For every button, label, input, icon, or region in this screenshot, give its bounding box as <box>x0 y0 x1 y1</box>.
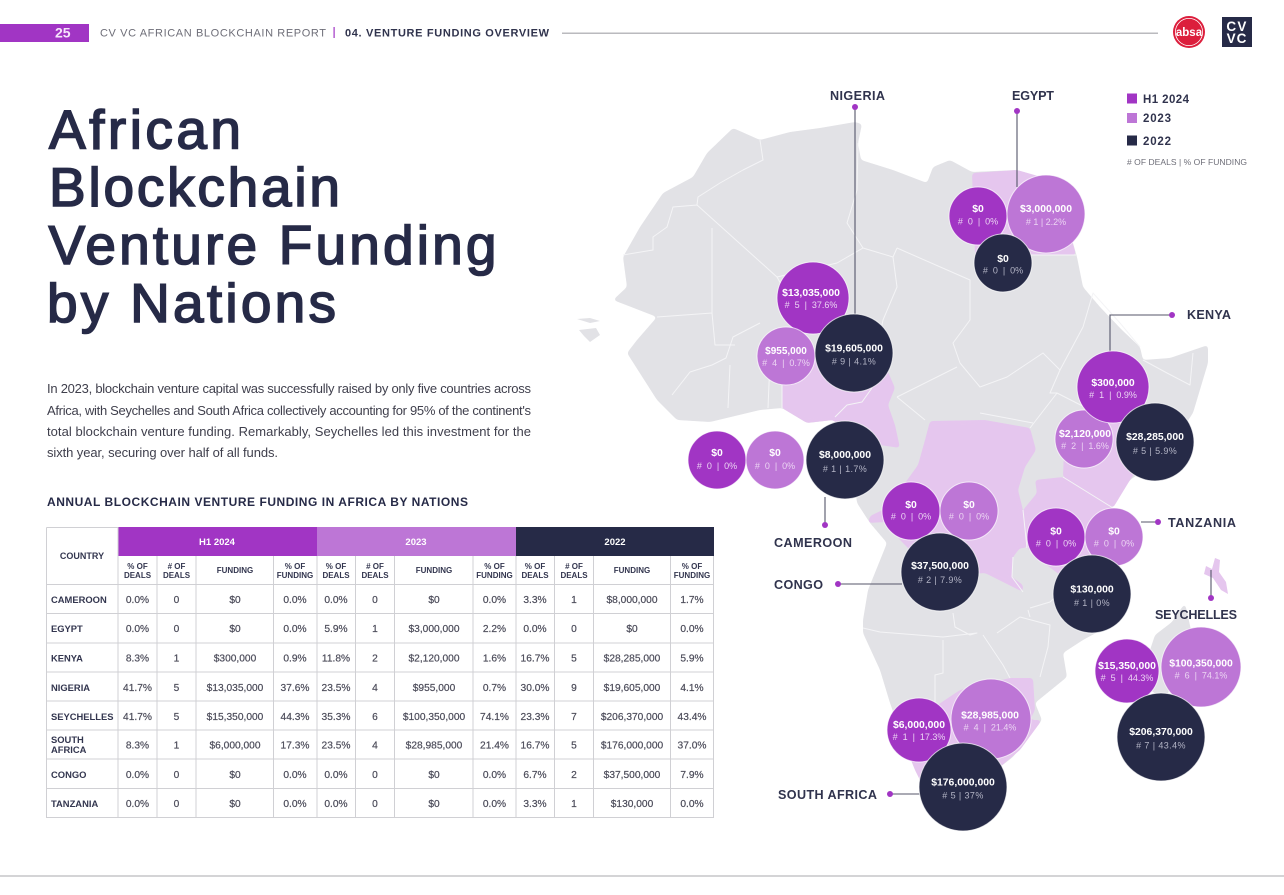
row: Egypt: $0 <box>626 624 638 635</box>
row: Kenya: 11.8% <box>322 654 350 664</box>
icon: absa logo <box>1173 16 1205 48</box>
country labels: EGYPT <box>1012 89 1054 103</box>
row: South Africa: 8.3% <box>126 740 149 752</box>
bubbles: Tanzania <box>1027 508 1143 633</box>
table header: columns: % OF <box>326 562 346 571</box>
row: Nigeria: 5 <box>174 683 180 694</box>
table header: columns: % OF <box>682 562 702 571</box>
row: Nigeria <box>51 682 704 694</box>
row: Congo: 0.0% <box>126 770 149 781</box>
row: South Africa: 17.3% <box>281 740 309 752</box>
bubbles: Egypt: $0 <box>997 254 1009 265</box>
row: Cameroon: 1 <box>571 595 577 606</box>
row: South Africa: AFRICA <box>51 744 87 755</box>
table header: columns: DEALS <box>361 571 389 580</box>
intro paragraph: In 2023, blockchain venture capital was successfully raised by only five countries across <box>47 381 532 396</box>
bubbles: Seychelles: $100,350,000 <box>1169 658 1233 670</box>
row: Cameroon: $8,000,000 <box>606 595 658 606</box>
row: Seychelles: 6 <box>372 712 378 723</box>
row: Congo: CONGO <box>51 769 86 780</box>
row: Cameroon: $0 <box>428 595 440 606</box>
row: South Africa: 21.4% <box>480 740 509 752</box>
bubbles: Kenya: # 1 | 0.9% <box>1089 390 1137 400</box>
bubbles: Seychelles: # 6 | 74.1% <box>1175 670 1227 680</box>
row: Seychelles: 44.3% <box>281 712 309 723</box>
title: Blockchain <box>49 156 340 218</box>
row: Egypt: 1 <box>372 624 378 635</box>
bubbles: Kenya: $28,285,000 <box>1126 432 1184 443</box>
row: Kenya: 2 <box>372 654 378 664</box>
row: Kenya <box>51 652 704 664</box>
bubbles: Tanzania: $0 <box>1108 526 1120 538</box>
bubbles: Kenya: $300,000 <box>1091 378 1135 389</box>
bubbles: Egypt: $0 <box>972 204 984 215</box>
bubbles: Nigeria: # 4 | 0.7% <box>762 358 810 368</box>
bubbles: Cameroon: # 1 | 1.7% <box>823 464 867 474</box>
row: Congo: 6.7% <box>523 770 547 781</box>
row: Nigeria: $955,000 <box>413 683 456 694</box>
row: Tanzania: $130,000 <box>611 799 654 810</box>
page header <box>0 16 1252 48</box>
row: Egypt: 0 <box>571 624 577 635</box>
country labels: CAMEROON <box>774 536 852 550</box>
row: Egypt: EGYPT <box>51 623 83 634</box>
row: Seychelles: 35.3% <box>322 712 350 723</box>
bubbles: Seychelles: # 5 | 44.3% <box>1101 673 1153 683</box>
row: Tanzania: TANZANIA <box>51 798 98 809</box>
row: South Africa: 37.0% <box>678 740 706 752</box>
row: Seychelles: 74.1% <box>480 712 509 723</box>
icon: CV VC logo <box>1222 17 1252 47</box>
row: Seychelles: $206,370,000 <box>601 712 663 723</box>
row: Kenya: KENYA <box>51 652 83 664</box>
row: Seychelles: 23.3% <box>521 712 549 723</box>
bubbles: Cameroon <box>688 421 884 499</box>
bubbles: Egypt: # 1 | 2.2% <box>1026 217 1066 227</box>
row: Egypt: 0.0% <box>523 624 547 635</box>
row: Cameroon: CAMEROON <box>51 594 107 605</box>
row: Egypt: 0.0% <box>283 624 307 635</box>
row: Cameroon: 0 <box>372 595 378 606</box>
connector lines and dots <box>822 104 1214 797</box>
row: Kenya: $2,120,000 <box>408 654 460 664</box>
bubbles: South Africa: $176,000,000 <box>931 778 995 788</box>
bubbles: Seychelles <box>1095 627 1241 781</box>
row: Nigeria: 30.0% <box>521 683 549 694</box>
legend: 2022 <box>1143 136 1171 148</box>
row: Egypt: 0.0% <box>680 624 704 635</box>
row: Kenya: 0.9% <box>283 654 307 664</box>
bubbles: Egypt <box>949 175 1085 292</box>
table header: columns: FUNDING <box>217 566 253 575</box>
row: South Africa: 16.7% <box>521 740 549 752</box>
table header: columns: DEALS <box>322 571 350 580</box>
row: Nigeria: 4 <box>372 683 378 694</box>
bubbles: Cameroon: $0 <box>711 448 723 459</box>
bubbles: Tanzania: # 0 | 0% <box>1094 538 1134 548</box>
row: Egypt: $3,000,000 <box>408 624 460 635</box>
row: Tanzania: $0 <box>229 799 241 810</box>
bubbles: Egypt: # 0 | 0% <box>983 266 1023 276</box>
bubbles: Congo: # 0 | 0% <box>891 512 931 522</box>
row: Seychelles: $15,350,000 <box>207 712 264 723</box>
row: Kenya: 1 <box>174 654 180 664</box>
country labels: CONGO <box>774 578 823 592</box>
bubbles: South Africa: $28,985,000 <box>961 710 1019 722</box>
row: Cameroon: 0.0% <box>283 595 307 606</box>
bubbles: Seychelles: # 7 | 43.4% <box>1136 740 1186 750</box>
row: Nigeria: $13,035,000 <box>207 683 264 694</box>
table header: columns: FUNDING <box>416 566 452 575</box>
bubbles: Congo <box>882 482 998 611</box>
row: Congo <box>51 769 704 781</box>
bubbles: Kenya: # 5 | 5.9% <box>1133 446 1177 456</box>
bubbles: Tanzania: # 0 | 0% <box>1036 538 1076 548</box>
legend: 2023 <box>1143 113 1171 125</box>
row: Kenya: 5 <box>571 654 577 664</box>
row: Nigeria: $19,605,000 <box>604 683 661 694</box>
bubbles: Seychelles: $15,350,000 <box>1098 661 1156 672</box>
row: South Africa: $176,000,000 <box>601 740 663 752</box>
row: South Africa: 5 <box>571 740 577 752</box>
bubbles: Cameroon: $0 <box>769 448 781 459</box>
row: Tanzania: 3.3% <box>523 799 547 810</box>
title <box>47 98 496 334</box>
icon: CV VC logo: VC <box>1227 31 1247 46</box>
bubbles: Egypt: # 0 | 0% <box>958 216 998 226</box>
row: South Africa: $28,985,000 <box>406 740 463 752</box>
table header: columns: DEALS <box>521 571 549 580</box>
row: Tanzania: 0.0% <box>126 799 149 810</box>
row: South Africa <box>51 734 706 755</box>
table header: columns: # OF <box>168 562 186 571</box>
row: Congo: 0.0% <box>324 770 348 781</box>
report name: CV VC AFRICAN BLOCKCHAIN REPORT <box>100 28 326 40</box>
table header: columns: # OF <box>366 562 384 571</box>
row: Egypt: 2.2% <box>483 624 506 635</box>
row: Congo: $0 <box>229 770 241 781</box>
row: South Africa: 4 <box>372 740 378 752</box>
bubbles: Nigeria: # 5 | 37.6% <box>785 300 837 310</box>
row: Tanzania: 0.0% <box>483 799 506 810</box>
title: Venture Funding <box>48 214 496 276</box>
row: Tanzania <box>51 798 704 810</box>
table heading: ANNUAL BLOCKCHAIN VENTURE FUNDING IN AFRICA BY NATIONS <box>47 495 468 509</box>
table header: columns <box>60 551 710 580</box>
bubbles: Congo: $37,500,000 <box>911 561 969 572</box>
row: Seychelles: SEYCHELLES <box>51 711 114 722</box>
row: Nigeria: 4.1% <box>680 683 704 694</box>
row: Nigeria: 41.7% <box>123 683 152 694</box>
row: South Africa: 1 <box>174 740 180 752</box>
table header: columns: COUNTRY <box>60 551 104 561</box>
bubbles: South Africa: # 4 | 21.4% <box>964 722 1016 732</box>
table header: year bands: 2022 <box>604 537 626 548</box>
bubbles: Kenya: # 2 | 1.6% <box>1061 441 1109 451</box>
icon: CV VC logo: CV <box>1226 19 1248 34</box>
country labels: SOUTH AFRICA <box>778 788 877 802</box>
row: Egypt: 5.9% <box>324 624 348 635</box>
title: African <box>49 98 241 160</box>
row: Seychelles: 7 <box>571 712 577 723</box>
row: South Africa: $6,000,000 <box>210 740 261 752</box>
row: Cameroon: 1.7% <box>680 595 704 606</box>
row: South Africa: SOUTH <box>51 734 84 745</box>
table header: columns: DEALS <box>124 571 152 580</box>
table header: columns: # OF <box>565 562 583 571</box>
table header: year bands: H1 2024 <box>199 537 236 548</box>
row: Congo: 0.0% <box>483 770 506 781</box>
bubbles: Cameroon: # 0 | 0% <box>755 461 795 471</box>
row: Cameroon: 0.0% <box>483 595 506 606</box>
country labels: TANZANIA <box>1168 516 1236 530</box>
title: by Nations <box>47 272 336 334</box>
bubbles: Nigeria <box>757 262 893 392</box>
row: Cameroon: 0.0% <box>324 595 348 606</box>
section name: 04. VENTURE FUNDING OVERVIEW <box>345 28 550 40</box>
intro paragraph: total blockchain venture funding. Remarkably, Seychelles led this investment for the <box>47 424 531 439</box>
table header: columns: % OF <box>484 562 505 571</box>
row: Seychelles: 43.4% <box>678 712 706 723</box>
row: Tanzania: 0.0% <box>324 799 348 810</box>
row: Cameroon: 3.3% <box>523 595 547 606</box>
bubbles: Egypt: $3,000,000 <box>1020 204 1072 215</box>
highlighted countries <box>782 170 1228 790</box>
row: Tanzania: 1 <box>571 799 577 810</box>
row: Egypt <box>51 623 704 635</box>
bubbles: Tanzania: $130,000 <box>1070 584 1114 596</box>
page number tab: 25 <box>55 24 71 40</box>
row: Congo: $0 <box>428 770 440 781</box>
row: Cameroon: 0.0% <box>126 595 149 606</box>
intro paragraph <box>47 381 532 460</box>
row: Egypt: 0.0% <box>126 624 149 635</box>
row: Nigeria: 23.5% <box>322 683 350 694</box>
row: Seychelles: 5 <box>174 712 180 723</box>
row: Tanzania: 0.0% <box>283 799 307 810</box>
row: Cameroon <box>51 594 704 606</box>
row: Nigeria: 9 <box>571 683 577 694</box>
row: Seychelles: $100,350,000 <box>403 712 465 723</box>
row: Congo: 0.0% <box>283 770 307 781</box>
row: Kenya: 16.7% <box>521 654 549 664</box>
row: Cameroon: 0 <box>174 595 180 606</box>
row: Seychelles: 41.7% <box>123 712 152 723</box>
bubbles: South Africa <box>887 679 1031 831</box>
table header: columns: FUNDING <box>476 571 513 580</box>
bubbles: Congo: # 2 | 7.9% <box>918 575 962 585</box>
intro paragraph: sixth year, securing over half of all funds. <box>47 445 278 460</box>
row: Kenya: 8.3% <box>126 654 149 664</box>
table header: columns: DEALS <box>163 571 191 580</box>
table header: columns: % OF <box>127 562 148 571</box>
country labels: KENYA <box>1187 308 1231 322</box>
bubbles: Nigeria: $19,605,000 <box>825 344 883 354</box>
legend: # OF DEALS | % OF FUNDING <box>1127 157 1247 167</box>
row: Kenya: 5.9% <box>680 654 704 664</box>
row: Tanzania: 0.0% <box>680 799 704 810</box>
bubbles: South Africa: # 1 | 17.3% <box>893 732 945 742</box>
bubbles: Congo: $0 <box>963 500 975 511</box>
row: Congo: 0 <box>174 770 180 781</box>
table header: columns: DEALS <box>560 571 588 580</box>
bubbles: Nigeria: $13,035,000 <box>782 288 840 299</box>
bubbles: Nigeria: # 9 | 4.1% <box>832 356 876 366</box>
row: Kenya: $28,285,000 <box>604 654 661 664</box>
map of Africa <box>577 122 1228 790</box>
bubbles: Congo: # 0 | 0% <box>949 512 989 522</box>
bubbles: Congo: $0 <box>905 500 917 511</box>
bubbles: Kenya: $2,120,000 <box>1059 429 1111 440</box>
row: Nigeria: NIGERIA <box>51 682 90 693</box>
row: Cameroon: $0 <box>229 595 241 606</box>
bubbles: Seychelles: $206,370,000 <box>1129 727 1193 738</box>
page number tab <box>0 24 89 42</box>
table header: columns: FUNDING <box>277 571 313 580</box>
row: Seychelles <box>51 711 706 723</box>
bubbles: South Africa: $6,000,000 <box>893 720 945 731</box>
row: Congo: 0 <box>372 770 378 781</box>
bubbles: Cameroon: $8,000,000 <box>819 450 871 461</box>
table header: year bands <box>118 527 714 556</box>
country labels: SEYCHELLES <box>1155 608 1237 622</box>
row: Congo: $37,500,000 <box>604 770 661 781</box>
row: Nigeria: 0.7% <box>483 683 506 694</box>
row: Tanzania: 0 <box>372 799 378 810</box>
row: Kenya: 1.6% <box>483 654 506 664</box>
table header: columns: % OF <box>525 562 545 571</box>
table header: columns: FUNDING <box>614 566 650 575</box>
row: Tanzania: 0 <box>174 799 180 810</box>
legend: H1 2024 <box>1143 94 1190 106</box>
row: South Africa: 23.5% <box>322 740 350 752</box>
table header: year bands: 2023 <box>405 537 427 548</box>
country labels: NIGERIA <box>830 89 885 103</box>
table header: columns: FUNDING <box>674 571 710 580</box>
funding table <box>46 527 714 818</box>
row: Kenya: $300,000 <box>214 654 257 664</box>
country labels <box>774 89 1237 802</box>
bubbles: Tanzania: $0 <box>1050 526 1062 538</box>
intro paragraph: Africa, with Seychelles and South Africa collectively accounting for 95% of the continent's <box>47 403 532 418</box>
table header: columns: % OF <box>285 562 305 571</box>
row: Egypt: $0 <box>229 624 241 635</box>
row: Congo: 7.9% <box>680 770 704 781</box>
row: Egypt: 0 <box>174 624 180 635</box>
row: Congo: 2 <box>571 770 577 781</box>
bubbles: Tanzania: # 1 | 0% <box>1074 598 1110 608</box>
bubbles: Nigeria: $955,000 <box>765 346 807 357</box>
legend <box>1127 94 1247 167</box>
icon: absa logo: absa <box>1176 27 1203 39</box>
bubbles: Kenya <box>1055 351 1194 481</box>
row: Tanzania: $0 <box>428 799 440 810</box>
bubbles: Cameroon: # 0 | 0% <box>697 461 737 471</box>
row: Nigeria: 37.6% <box>281 683 309 694</box>
bubbles: South Africa: # 5 | 37% <box>942 790 984 800</box>
